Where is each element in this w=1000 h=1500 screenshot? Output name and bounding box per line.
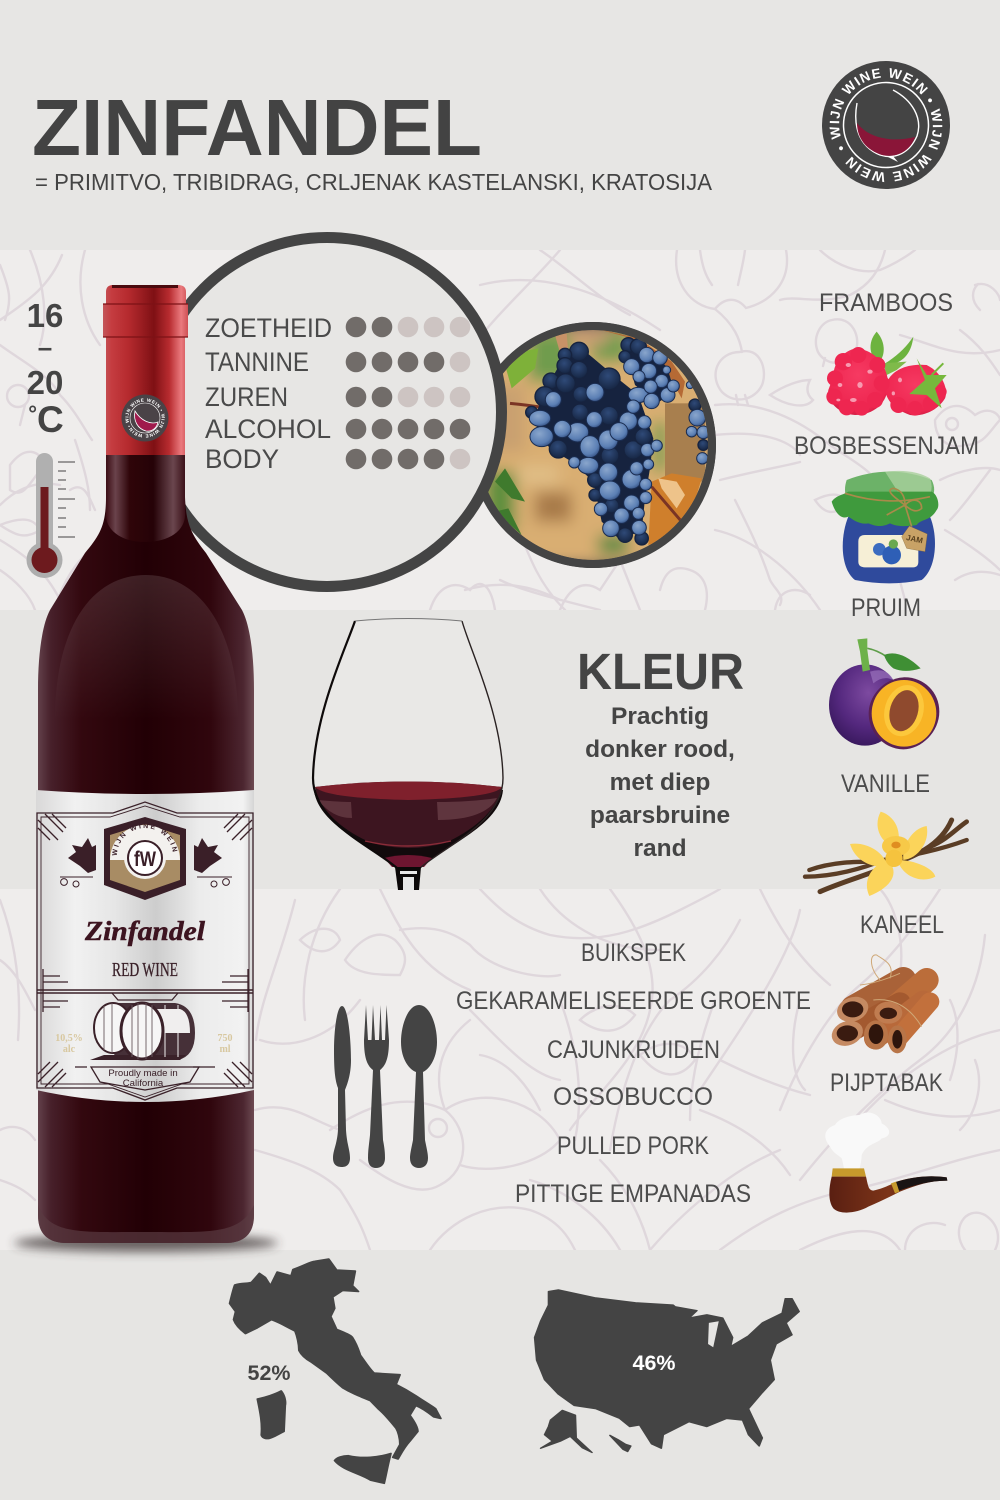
label subtitle: RED WINE xyxy=(112,959,178,981)
sicily xyxy=(335,1453,391,1483)
rating: zoetheid xyxy=(205,313,470,343)
wine xyxy=(315,782,502,848)
barrels xyxy=(90,1003,195,1060)
colour heading: KLEUR xyxy=(577,643,744,700)
icon: thermometer xyxy=(26,453,75,578)
glass base xyxy=(314,790,503,868)
wine glass xyxy=(313,618,503,890)
aroma label: vanille: VANILLE xyxy=(841,770,930,798)
rating: tannine: TANNINE xyxy=(205,347,309,377)
icon: pipe xyxy=(825,1113,947,1213)
italy share: 52% xyxy=(248,1362,291,1385)
food pairing list: OSSOBUCCO xyxy=(553,1083,713,1111)
colour description: met diep xyxy=(610,769,710,796)
aroma label: bosbessenjam: BOSBESSENJAM xyxy=(794,432,979,460)
label wine name: Zinfandel xyxy=(84,916,206,946)
label badge xyxy=(104,817,186,900)
label volume xyxy=(218,1033,232,1055)
rating: zoetheid: ZOETHEID xyxy=(205,313,332,343)
aroma label: kaneel: KANEEL xyxy=(860,911,944,939)
serving temperature: 20 xyxy=(27,364,63,401)
label origin xyxy=(108,1068,178,1089)
label alcohol xyxy=(55,1033,83,1055)
label alcohol: 10,5% xyxy=(55,1033,83,1044)
food pairing list: PITTIGE EMPANADAS xyxy=(515,1180,751,1208)
bottle body xyxy=(38,455,254,1243)
floral pattern: upper band xyxy=(0,250,1000,610)
grapes xyxy=(526,338,709,545)
label badge: WIJN WINE WEIN xyxy=(112,824,178,856)
serving temperature: 16 xyxy=(27,297,63,334)
panel: grape photo circle xyxy=(470,322,716,568)
food pairing list: PULLED PORK xyxy=(557,1132,709,1160)
label alcohol: alc xyxy=(63,1044,76,1055)
wine label xyxy=(36,790,254,1102)
aroma label: pijptabak: PIJPTABAK xyxy=(830,1069,943,1097)
icon: jam jar: JAM xyxy=(905,533,924,545)
colour description: rand xyxy=(633,835,687,862)
rating: body: BODY xyxy=(205,444,279,474)
serving temperature: – xyxy=(38,332,52,362)
aroma label: framboos: FRAMBOOS xyxy=(819,289,953,317)
rating: alcohol: ALCOHOL xyxy=(205,414,331,444)
colour description: paarsbruine xyxy=(590,802,730,829)
serving temperature: C xyxy=(37,399,64,440)
hawaii xyxy=(610,1435,631,1452)
label badge: fW xyxy=(134,848,156,871)
colour description: donker rood, xyxy=(585,736,735,763)
synonyms subtitle: = PRIMITVO, TRIBIDRAG, CRLJENAK KASTELANSKI, KRATOSIJA xyxy=(35,169,712,195)
capsule xyxy=(103,285,188,455)
title: ZINFANDEL xyxy=(32,83,482,172)
label origin: California xyxy=(123,1078,164,1089)
colour description: Prachtig xyxy=(611,703,709,730)
aroma label: pruim: PRUIM xyxy=(851,594,921,622)
label frame xyxy=(37,802,253,1100)
label volume: ml xyxy=(219,1044,231,1055)
rating: body xyxy=(205,444,470,474)
icon: vanilla xyxy=(805,812,967,896)
photo background xyxy=(488,330,708,560)
label origin: Proudly made in xyxy=(108,1068,178,1079)
icon: cutlery xyxy=(333,1005,437,1168)
icon: plum xyxy=(829,638,939,749)
bottle shadow xyxy=(14,1234,278,1252)
food pairing list: BUIKSPEK xyxy=(581,939,686,967)
serving temperature xyxy=(27,297,64,440)
rating: tannine xyxy=(205,347,470,377)
wine bottle xyxy=(36,285,254,1243)
panel: taste profile circle xyxy=(152,238,502,586)
icon: jam jar xyxy=(832,471,938,583)
rating: zuren xyxy=(205,382,470,412)
food pairing list: GEKARAMELISEERDE GROENTE xyxy=(456,987,811,1015)
sardinia xyxy=(257,1391,285,1439)
floral pattern: lower band xyxy=(0,889,1000,1250)
icon: cinnamon xyxy=(828,955,930,1053)
map: united states xyxy=(535,1290,799,1452)
smoke xyxy=(825,1113,889,1172)
icon: raspberries xyxy=(826,332,947,416)
alaska xyxy=(541,1410,592,1452)
map: italy xyxy=(230,1259,441,1483)
rating: alcohol xyxy=(205,414,470,444)
grape cluster shadow xyxy=(535,347,675,538)
capsule seal: • WIJN WINE WEIN • WIJN WINE WEIN xyxy=(125,398,165,438)
logo: wine wein seal: • WIJN WINE WEIN • WIJN WINE WEIN xyxy=(830,68,942,182)
food pairing list xyxy=(456,939,811,1208)
label grape leaves xyxy=(60,838,232,887)
colour description xyxy=(585,703,735,862)
rating: zuren: ZUREN xyxy=(205,382,288,412)
food pairing list: CAJUNKRUIDEN xyxy=(547,1036,720,1064)
usa share: 46% xyxy=(632,1352,676,1375)
label volume: 750 xyxy=(218,1033,232,1044)
serving temperature: ° xyxy=(28,401,37,426)
